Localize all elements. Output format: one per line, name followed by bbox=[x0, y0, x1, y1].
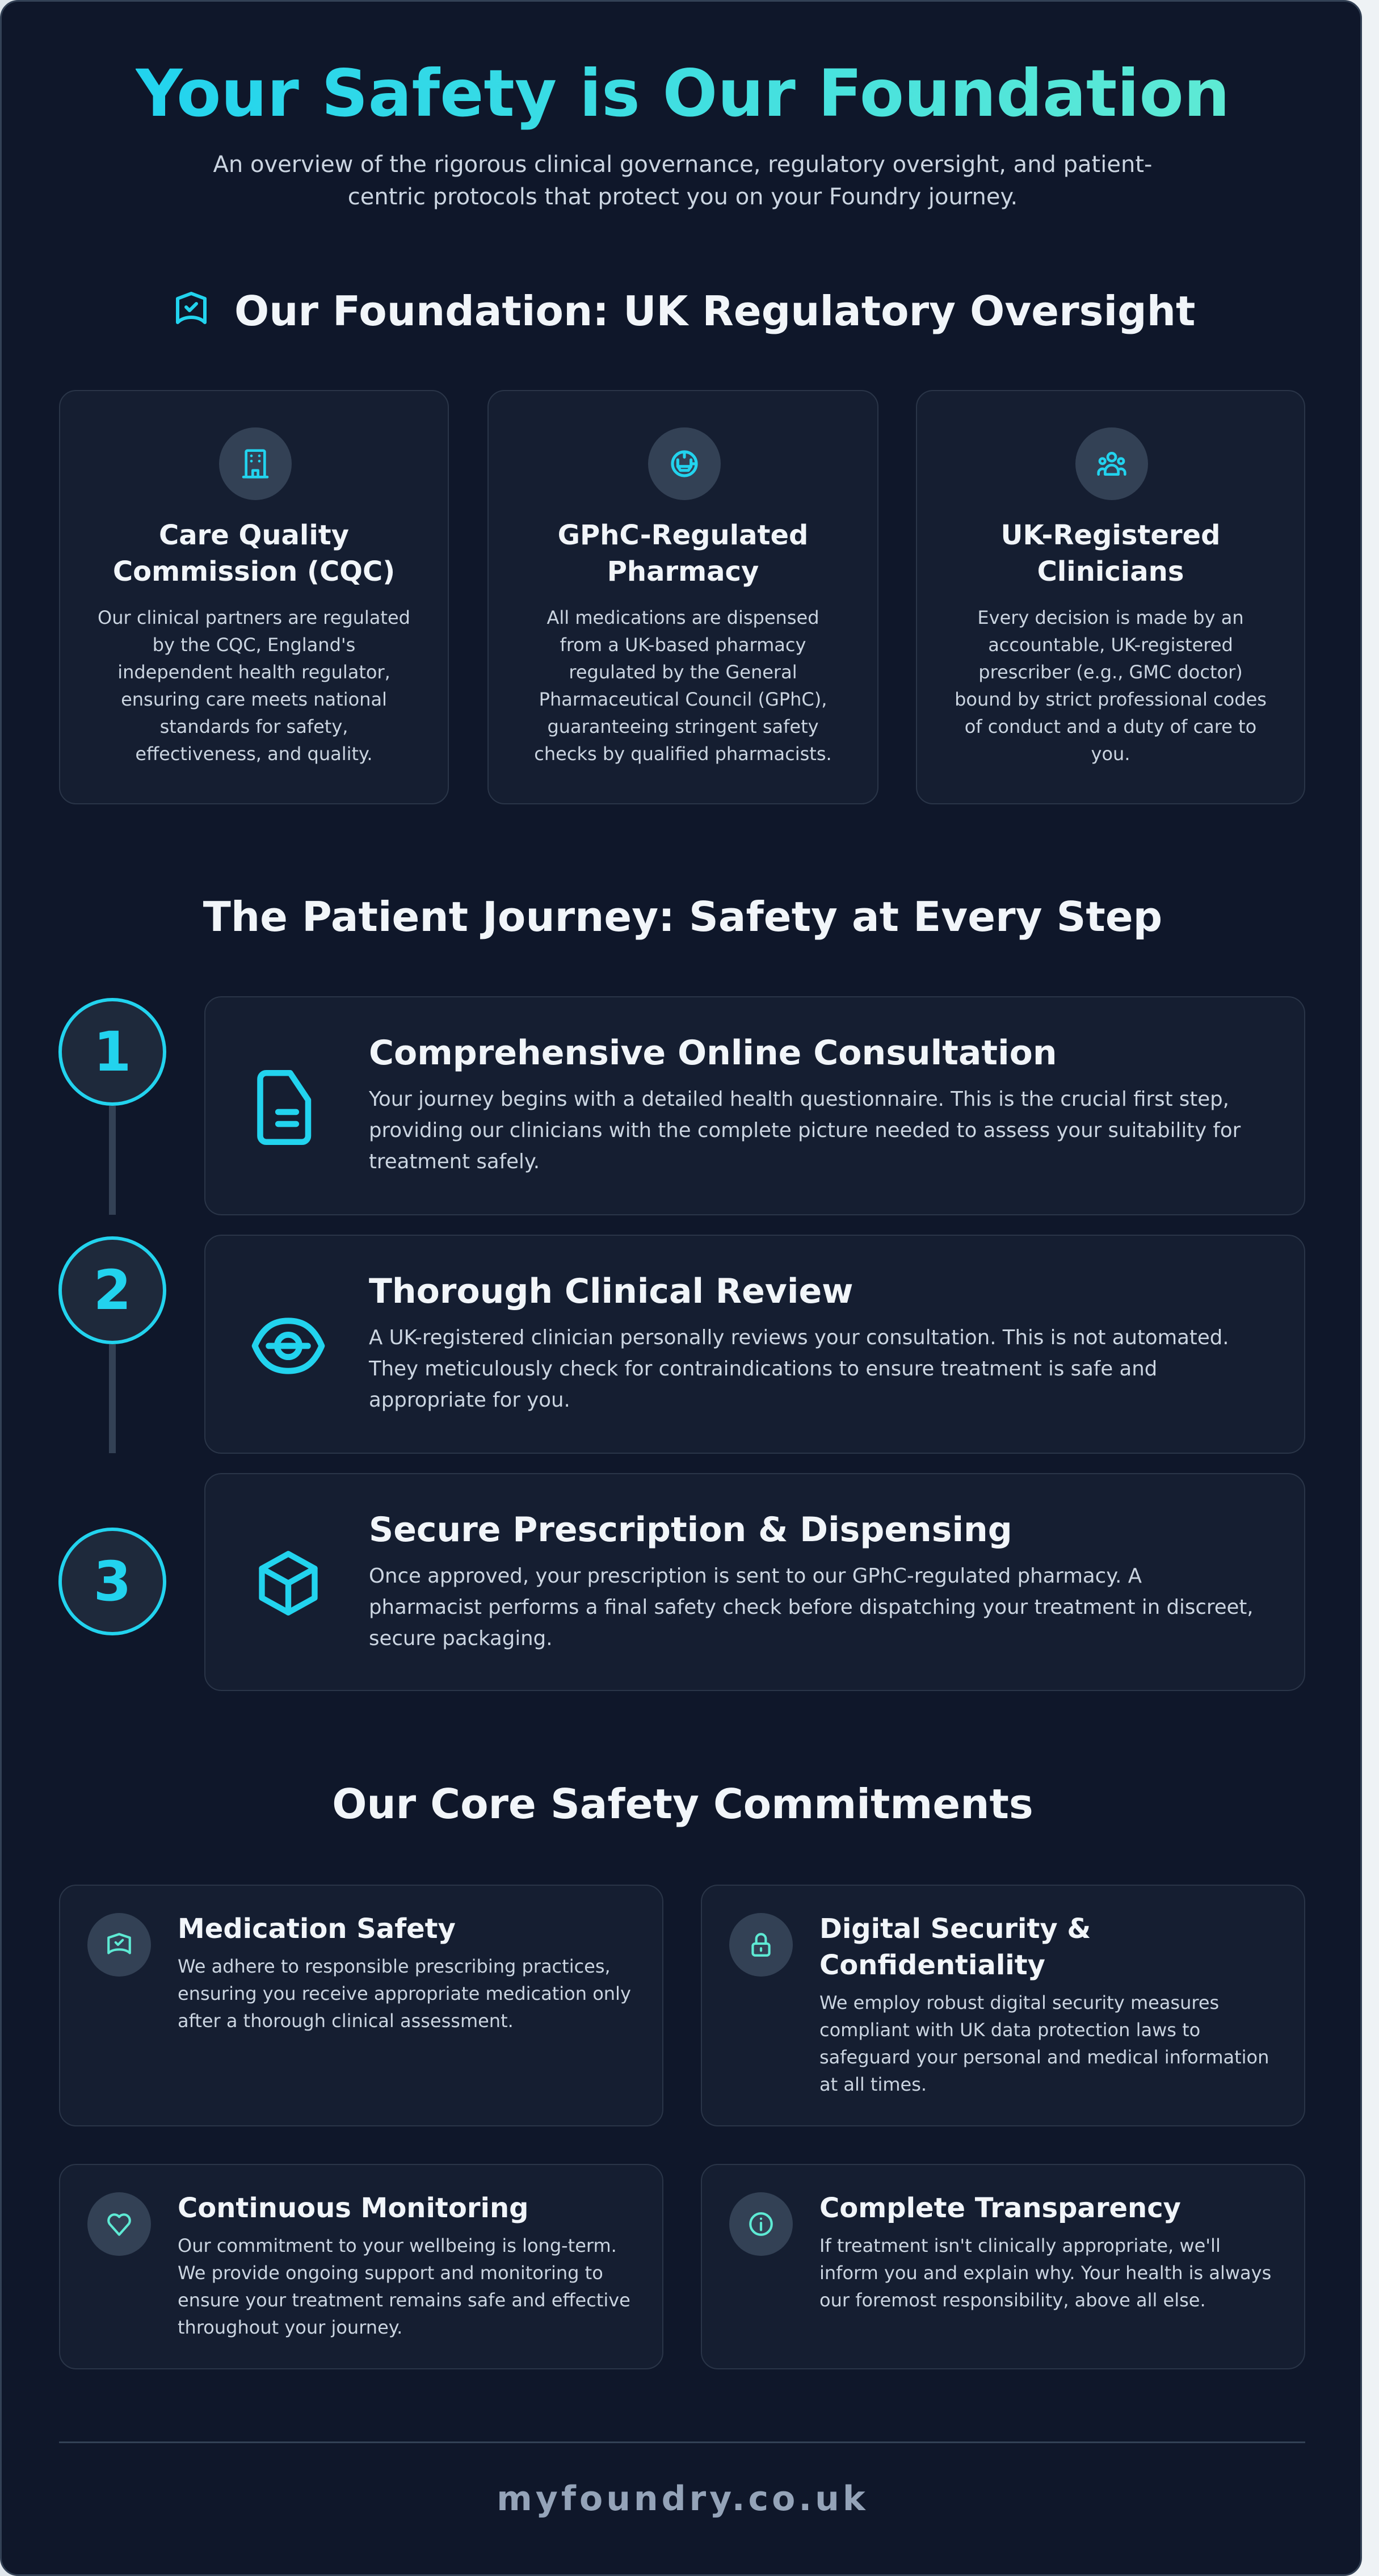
card title bbox=[113, 519, 395, 588]
card text: guaranteeing stringent safety bbox=[547, 716, 819, 737]
step card bbox=[204, 1235, 1305, 1454]
text: after a thorough clinical assessment. bbox=[178, 2010, 514, 2032]
card text: bound by strict professional codes bbox=[955, 689, 1267, 710]
title: Confidentiality bbox=[819, 1949, 1045, 1981]
icon: shield badge bbox=[176, 292, 207, 324]
card text: independent health regulator, bbox=[117, 661, 390, 683]
title: Medication Safety bbox=[178, 1913, 456, 1945]
heading: UK regulatory oversight bbox=[176, 287, 1195, 335]
card text: standards for safety, bbox=[160, 716, 348, 737]
card text: by the CQC, England's bbox=[153, 634, 355, 656]
panel: clinicians bbox=[916, 390, 1305, 804]
card title bbox=[1001, 519, 1220, 588]
number circle 2 bbox=[58, 1236, 166, 1344]
text bbox=[819, 2235, 1271, 2311]
panel: CQC bbox=[59, 390, 449, 804]
title: Your Safety is Our Foundation bbox=[136, 56, 1230, 131]
text: compliant with UK data protection laws to bbox=[819, 2019, 1200, 2041]
card text: regulated by the General bbox=[569, 661, 797, 683]
icon: eye bbox=[252, 1318, 325, 1374]
number circle 3 bbox=[58, 1528, 166, 1635]
card text bbox=[98, 607, 410, 765]
step title: Thorough Clinical Review bbox=[369, 1272, 854, 1311]
footer: myfoundry.co.uk bbox=[497, 2479, 869, 2519]
card text bbox=[534, 607, 832, 765]
panel: transparency bbox=[701, 2164, 1305, 2369]
step 3 bbox=[58, 1473, 1305, 1691]
step text: pharmacist performs a final safety check before dispatching your treatment in discreet, bbox=[369, 1596, 1254, 1619]
text bbox=[178, 1956, 631, 2032]
icon: users bbox=[1075, 427, 1148, 500]
text bbox=[819, 1992, 1269, 2095]
text: We provide ongoing support and monitoring to bbox=[178, 2262, 603, 2284]
step text: secure packaging. bbox=[369, 1627, 553, 1650]
text: inform you and explain why. Your health is always bbox=[819, 2262, 1271, 2284]
icon: pharmacy bbox=[648, 427, 721, 500]
icon: building bbox=[219, 427, 292, 500]
heading text: Our Foundation: UK Regulatory Oversight bbox=[234, 287, 1195, 335]
step 1 bbox=[58, 996, 1305, 1215]
card text: Pharmaceutical Council (GPhC), bbox=[539, 689, 827, 710]
heading: patient journey: The Patient Journey: Safety at Every Step bbox=[203, 893, 1162, 941]
subtitle bbox=[213, 152, 1152, 210]
text: safeguard your personal and medical information bbox=[819, 2046, 1269, 2068]
card text: accountable, UK-registered bbox=[988, 634, 1233, 656]
number circle 1 bbox=[58, 998, 166, 1106]
text: If treatment isn't clinically appropriate, we'll bbox=[819, 2235, 1221, 2256]
step text: treatment safely. bbox=[369, 1150, 540, 1173]
connector line bbox=[109, 1344, 116, 1453]
text: throughout your journey. bbox=[178, 2317, 402, 2338]
heading: core commitments: Our Core Safety Commitments bbox=[332, 1780, 1033, 1828]
number circle 2: 2 bbox=[94, 1258, 131, 1322]
card title: UK-Registered bbox=[1001, 519, 1220, 551]
card text: prescriber (e.g., GMC doctor) bbox=[978, 661, 1243, 683]
step title: Comprehensive Online Consultation bbox=[369, 1033, 1057, 1073]
text: We adhere to responsible prescribing practices, bbox=[178, 1956, 611, 1977]
card text: checks by qualified pharmacists. bbox=[534, 743, 832, 765]
panel: digital security bbox=[701, 1885, 1305, 2126]
step card bbox=[204, 1473, 1305, 1691]
step text bbox=[369, 1326, 1229, 1412]
card text: from a UK-based pharmacy bbox=[560, 634, 806, 656]
card title: Commission (CQC) bbox=[113, 556, 395, 588]
icon: document bbox=[257, 1070, 311, 1145]
title bbox=[819, 1913, 1091, 1981]
text: ensure your treatment remains safe and effective bbox=[178, 2289, 630, 2311]
card text: effectiveness, and quality. bbox=[135, 743, 373, 765]
card text: ensuring care meets national bbox=[121, 689, 387, 710]
connector line bbox=[109, 1106, 116, 1215]
step card bbox=[204, 996, 1305, 1215]
number circle 1: 1 bbox=[94, 1020, 131, 1084]
icon: lock bbox=[729, 1913, 793, 1977]
step text bbox=[369, 1088, 1241, 1173]
panel: monitoring bbox=[59, 2164, 663, 2369]
card title: GPhC-Regulated bbox=[558, 519, 808, 551]
subtitle: An overview of the rigorous clinical governance, regulatory oversight, and patient- bbox=[213, 152, 1152, 178]
step text: They meticulously check for contraindications to ensure treatment is safe and bbox=[369, 1357, 1157, 1381]
step text: Once approved, your prescription is sent to our GPhC-regulated pharmacy. A bbox=[369, 1564, 1142, 1588]
card title: Clinicians bbox=[1037, 556, 1184, 588]
icon: box bbox=[259, 1551, 318, 1616]
card text: Our clinical partners are regulated bbox=[98, 607, 410, 628]
title: Complete Transparency bbox=[819, 2192, 1181, 2224]
text: at all times. bbox=[819, 2074, 927, 2095]
step title: Secure Prescription & Dispensing bbox=[369, 1510, 1012, 1550]
card title: Care Quality bbox=[159, 519, 349, 551]
title: Continuous Monitoring bbox=[178, 2192, 529, 2224]
text: Our commitment to your wellbeing is long-term. bbox=[178, 2235, 617, 2256]
icon: heart bbox=[87, 2192, 151, 2256]
step text: appropriate for you. bbox=[369, 1388, 570, 1412]
icon: info bbox=[729, 2192, 793, 2256]
card text: Every decision is made by an bbox=[977, 607, 1244, 628]
panel: GPhC bbox=[487, 390, 878, 804]
text: We employ robust digital security measures bbox=[819, 1992, 1219, 2013]
card text: of conduct and a duty of care to bbox=[965, 716, 1256, 737]
card text: All medications are dispensed bbox=[547, 607, 819, 628]
number circle 3: 3 bbox=[94, 1550, 131, 1613]
step text: providing our clinicians with the complete picture needed to assess your suitability for bbox=[369, 1119, 1241, 1142]
subtitle: centric protocols that protect you on your Foundry journey. bbox=[348, 184, 1018, 210]
card title bbox=[558, 519, 808, 588]
step text: A UK-registered clinician personally reviews your consultation. This is not automated. bbox=[369, 1326, 1229, 1349]
step text bbox=[369, 1564, 1254, 1650]
title: Digital Security & bbox=[819, 1913, 1091, 1945]
text: our foremost responsibility, above all else. bbox=[819, 2289, 1206, 2311]
text: ensuring you receive appropriate medication only bbox=[178, 1983, 631, 2004]
panel: medication safety bbox=[59, 1885, 663, 2126]
card text: you. bbox=[1091, 743, 1130, 765]
card text bbox=[955, 607, 1267, 765]
step 2 bbox=[58, 1235, 1305, 1454]
card title: Pharmacy bbox=[607, 556, 759, 588]
text bbox=[178, 2235, 630, 2338]
step text: Your journey begins with a detailed health questionnaire. This is the crucial first step, bbox=[369, 1088, 1229, 1111]
icon: shield check bbox=[87, 1913, 151, 1977]
